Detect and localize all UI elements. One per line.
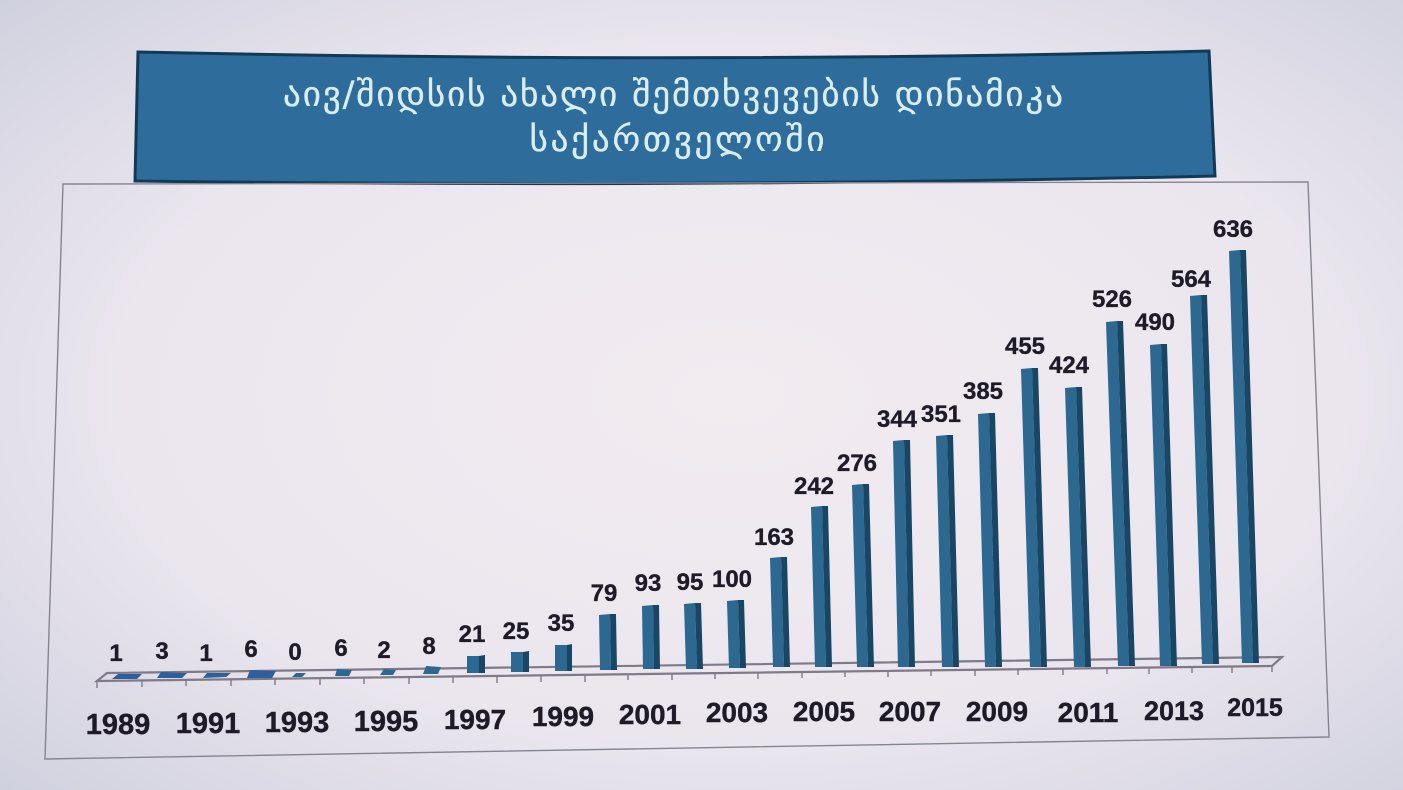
bar 2002: 95 [677, 569, 703, 669]
x-axis year labels: 2007 [879, 696, 941, 727]
bar 1990: 3: 3 [155, 638, 169, 665]
bar 2006: 276: 276 [837, 450, 877, 477]
x-axis year labels: 2003 [706, 697, 768, 728]
bar 2001: 93: 93 [635, 570, 661, 597]
bar 2007: 344: 344 [877, 406, 918, 433]
x-axis year labels: 2001 [619, 699, 681, 730]
bar 2013: 490 [1135, 309, 1177, 666]
bar 1999: 35 [548, 610, 574, 671]
x-axis year labels [86, 694, 1283, 741]
bar 1989: 1 [109, 640, 142, 679]
bar 1995: 2 [377, 637, 396, 675]
bar 2005: 242: 242 [794, 473, 834, 500]
x-axis year labels: 1995 [354, 706, 418, 738]
title banner [135, 51, 1215, 184]
bar 2010: 455 [1005, 333, 1047, 667]
bar 1998: 25: 25 [503, 618, 529, 645]
bar 2014: 564: 564 [1171, 266, 1212, 293]
bar 2001: 93 [635, 570, 661, 669]
bar 1990: 3 [155, 638, 187, 678]
x-axis year labels: 2005 [793, 696, 855, 727]
x-axis year labels: 1989 [86, 709, 150, 741]
x-axis year labels: 2011 [1058, 697, 1118, 728]
chart panel [45, 182, 1329, 759]
bar 2012: 526: 526 [1092, 286, 1132, 313]
bar 2009: 385: 385 [963, 378, 1003, 405]
title text: საქართველოში [530, 120, 824, 160]
bar 2003: 100 [712, 566, 752, 668]
bar 1996: 8 [422, 633, 441, 674]
bar 2009: 385 [963, 378, 1003, 667]
bar 2015: 636 [1213, 216, 1259, 663]
x-axis year labels: 2009 [966, 696, 1028, 727]
bar 1991: 1: 1 [199, 640, 213, 667]
x-axis year labels: 1999 [532, 701, 594, 732]
bar 1992: 6 [244, 636, 276, 678]
bar 2004: 163: 163 [754, 524, 794, 551]
bar 1995: 2: 2 [377, 637, 391, 664]
x-axis year labels: 1997 [444, 704, 506, 735]
bar 2013: 490: 490 [1135, 309, 1175, 336]
bar 2002: 95: 95 [677, 569, 703, 596]
bar 2005: 242 [794, 473, 834, 667]
bar 2015: 636: 636 [1213, 216, 1253, 243]
title text: აივ/შიდსის ახალი შემთხვევების დინამიკა [283, 75, 1063, 115]
bar 2014: 564 [1171, 266, 1219, 664]
title text [283, 75, 1063, 160]
bar 2011: 424 [1049, 352, 1091, 667]
bar 2004: 163 [754, 524, 794, 667]
bar 2008: 351 [921, 401, 961, 667]
bar 1997: 21: 21 [459, 621, 485, 648]
bar 2003: 100: 100 [712, 566, 752, 593]
bar 1993: 0 [288, 639, 306, 677]
bar 2011: 424: 424 [1049, 352, 1090, 379]
x-axis year labels: 2013 [1144, 696, 1204, 726]
bar 1999: 35: 35 [548, 610, 574, 637]
bar 1997: 21 [459, 621, 485, 673]
bar 2012: 526 [1092, 286, 1135, 666]
bar 1994: 6 [334, 635, 352, 676]
x-axis year labels: 1993 [265, 707, 329, 739]
bar 1989: 1: 1 [109, 640, 123, 667]
bar 2000: 79 [591, 580, 617, 670]
bar 1994: 6: 6 [334, 635, 348, 662]
bar 2007: 344 [877, 406, 918, 667]
bar 2010: 455: 455 [1005, 333, 1045, 360]
bar 2006: 276 [837, 450, 877, 667]
chart floor and axis [97, 657, 1282, 688]
bar 1998: 25 [503, 618, 529, 672]
x-axis year labels: 1991 [176, 708, 240, 740]
bar 2008: 351: 351 [921, 401, 961, 428]
bar 2000: 79: 79 [591, 580, 617, 607]
bar 1991: 1 [199, 640, 231, 678]
bar 1996: 8: 8 [422, 633, 436, 660]
bar 1992: 6: 6 [244, 636, 258, 663]
x-axis year labels: 2015 [1227, 694, 1283, 722]
bar 1993: 0: 0 [288, 639, 302, 666]
